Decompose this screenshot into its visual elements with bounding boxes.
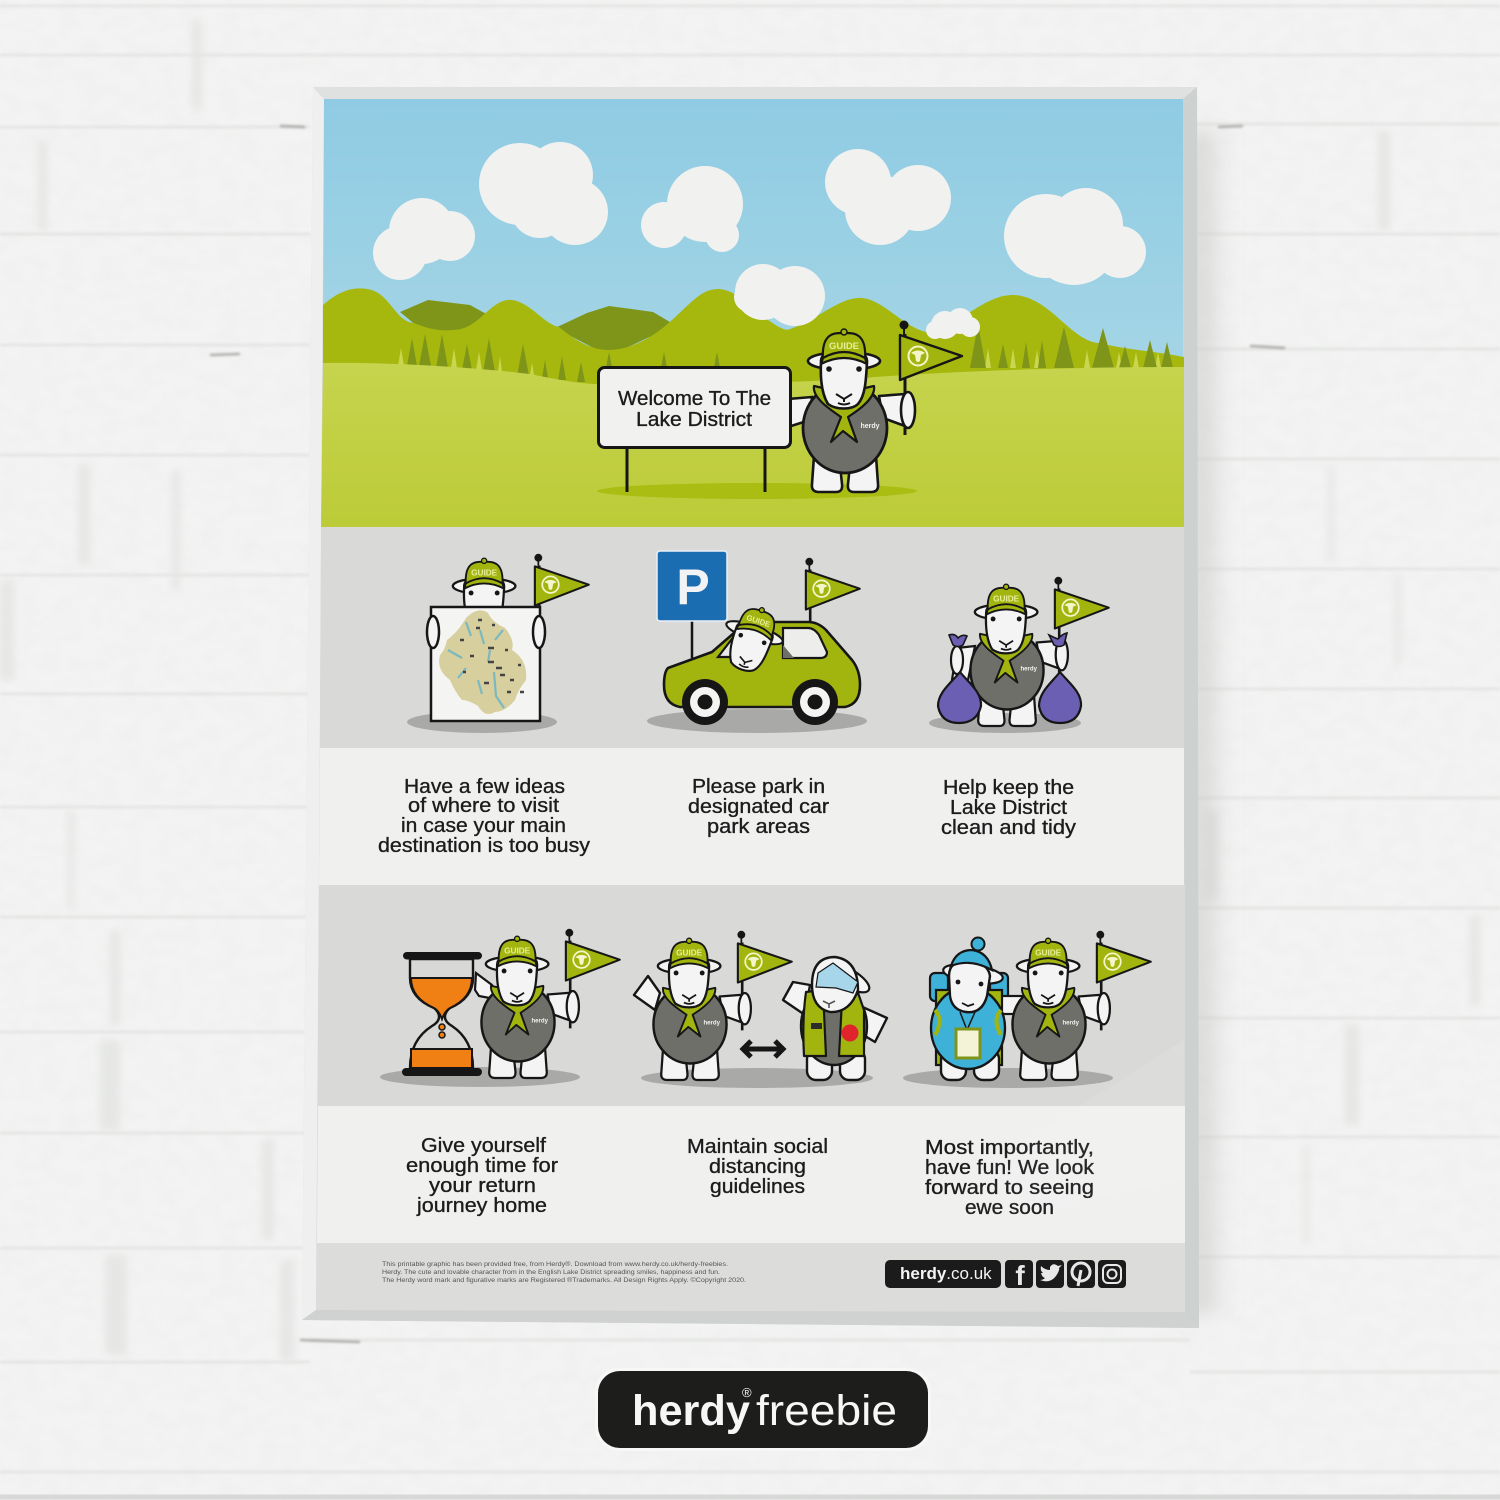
icon: twitter xyxy=(1036,1260,1064,1288)
sheep head at car window xyxy=(714,599,791,679)
caption: tidy: clean and tidy xyxy=(941,817,1076,839)
shadow xyxy=(647,709,867,733)
poster sheet xyxy=(316,99,1185,1312)
caption: have fun: have fun! We look xyxy=(925,1157,1095,1179)
guide sheep xyxy=(481,929,620,1078)
waving arm xyxy=(634,976,660,1010)
grey band bottom xyxy=(318,885,1185,1106)
distancing arrow xyxy=(743,1041,783,1057)
caption: distancing xyxy=(687,1136,828,1198)
caption: ideas: destination is too busy xyxy=(378,835,590,857)
caption: ideas: Have a few ideas xyxy=(404,776,565,798)
left bag xyxy=(938,634,981,723)
icon: instagram xyxy=(1098,1260,1126,1288)
caption: parking: Please park in xyxy=(692,776,825,798)
right bag xyxy=(1039,633,1081,723)
glass reflection xyxy=(900,1040,1184,1240)
caption: ideas: of where to visit xyxy=(408,795,559,817)
tile 2: sheep in car with parking sign xyxy=(647,551,867,733)
sheep left arm xyxy=(788,397,812,427)
footer legal text: The Herdy word mark and figurative marks are Registered ®Trademarks. All Design Rights Apply. ©Copyright 2020. xyxy=(382,1276,746,1284)
caption: distancing: guidelines xyxy=(710,1176,805,1198)
white foreground clouds xyxy=(734,264,980,339)
caption: have fun: ewe soon xyxy=(965,1197,1054,1219)
welcome sign xyxy=(598,368,790,448)
footer band xyxy=(316,1243,1185,1312)
tree line xyxy=(398,324,1173,382)
flag xyxy=(534,554,589,653)
tile 1: sheep holding map xyxy=(407,554,589,733)
parking sign xyxy=(657,551,727,658)
caption: ideas: in case your main xyxy=(401,815,566,837)
meadow xyxy=(321,363,1184,527)
icon: pinterest xyxy=(1067,1260,1095,1288)
green hills xyxy=(323,288,1184,400)
guide sheep xyxy=(1012,931,1151,1080)
shadow xyxy=(929,713,1081,733)
parking sign: P xyxy=(676,559,710,615)
footer legal text xyxy=(382,1260,746,1284)
welcome sign: Welcome To The xyxy=(618,388,771,410)
tile 5: social distancing xyxy=(634,931,887,1088)
hero: welcome sign and guide sheep xyxy=(597,320,962,499)
wheels xyxy=(682,679,838,725)
sheep head peeking xyxy=(453,558,515,627)
caption: distancing: Maintain social xyxy=(687,1136,828,1158)
guide sheep xyxy=(653,931,792,1080)
guide sheep with flag xyxy=(803,320,962,492)
badge: herdy freebie: freebie xyxy=(756,1387,897,1435)
icon: facebook: f xyxy=(1015,1260,1025,1291)
grey band top xyxy=(320,527,1184,748)
caption: distancing: distancing xyxy=(709,1156,806,1178)
distant dark hills xyxy=(400,300,675,356)
guide sheep xyxy=(970,577,1109,726)
footer legal text: This printable graphic has been provided free, from Herdy®. Download from www.herdy.co.uk/herdy-freebies. xyxy=(382,1260,728,1268)
footer logo: herdy.co.uk xyxy=(885,1260,1001,1288)
hourglass xyxy=(402,952,482,1076)
sky xyxy=(323,99,1183,370)
social icons xyxy=(1005,1260,1126,1291)
caption: parking: park areas xyxy=(707,816,810,838)
shadow xyxy=(407,711,557,733)
caption: have fun: forward to seeing xyxy=(925,1177,1094,1199)
shadow to the right of the frame xyxy=(1190,130,1230,1315)
hands xyxy=(427,616,439,648)
caption: parking: designated car xyxy=(688,796,829,818)
white band bottom xyxy=(317,1106,1185,1243)
caption: time: your return xyxy=(429,1175,536,1197)
caption: time: Give yourself xyxy=(421,1135,546,1157)
badge: herdy freebie xyxy=(595,1368,931,1451)
caption: ideas xyxy=(378,776,590,857)
poster frame xyxy=(302,87,1199,1328)
flag xyxy=(805,558,860,657)
tile 6: have fun with hiker sheep xyxy=(903,931,1151,1088)
tile 4: hourglass and sheep xyxy=(380,929,620,1087)
welcome sign: Lake District xyxy=(636,409,752,431)
shadow xyxy=(903,1068,1113,1088)
caption: have fun xyxy=(925,1137,1095,1219)
tile 3: sheep with rubbish bags xyxy=(929,577,1109,733)
caption: tidy xyxy=(941,777,1076,839)
shadow xyxy=(641,1068,873,1088)
hiker sheep xyxy=(930,938,1025,1080)
badge: herdy freebie: herdy xyxy=(632,1387,750,1435)
sign posts xyxy=(627,446,765,492)
caption: tidy: Help keep the xyxy=(943,777,1074,799)
sheep arm xyxy=(475,973,500,1000)
footer legal text: Herdy. The cute and lovable character from in the English Lake District spreading smiles, happiness and fun. xyxy=(382,1269,720,1276)
white band top xyxy=(319,748,1184,885)
badge: herdy freebie: ® xyxy=(742,1385,752,1400)
car xyxy=(664,622,860,707)
ground shadow xyxy=(597,483,917,499)
map xyxy=(431,607,540,721)
caption: parking xyxy=(688,776,829,838)
caption: have fun: Most importantly, xyxy=(925,1137,1094,1159)
clouds xyxy=(373,142,1146,285)
caption: time: journey home xyxy=(416,1195,547,1217)
left arm xyxy=(952,646,975,680)
caption: time xyxy=(406,1135,558,1217)
footer logo: herdy.co.uk: herdy.co.uk xyxy=(900,1264,992,1283)
shadow xyxy=(380,1067,580,1087)
caption: tidy: Lake District xyxy=(950,797,1067,819)
volunteer sheep with visor and vest xyxy=(783,957,887,1080)
caption: time: enough time for xyxy=(406,1155,558,1177)
